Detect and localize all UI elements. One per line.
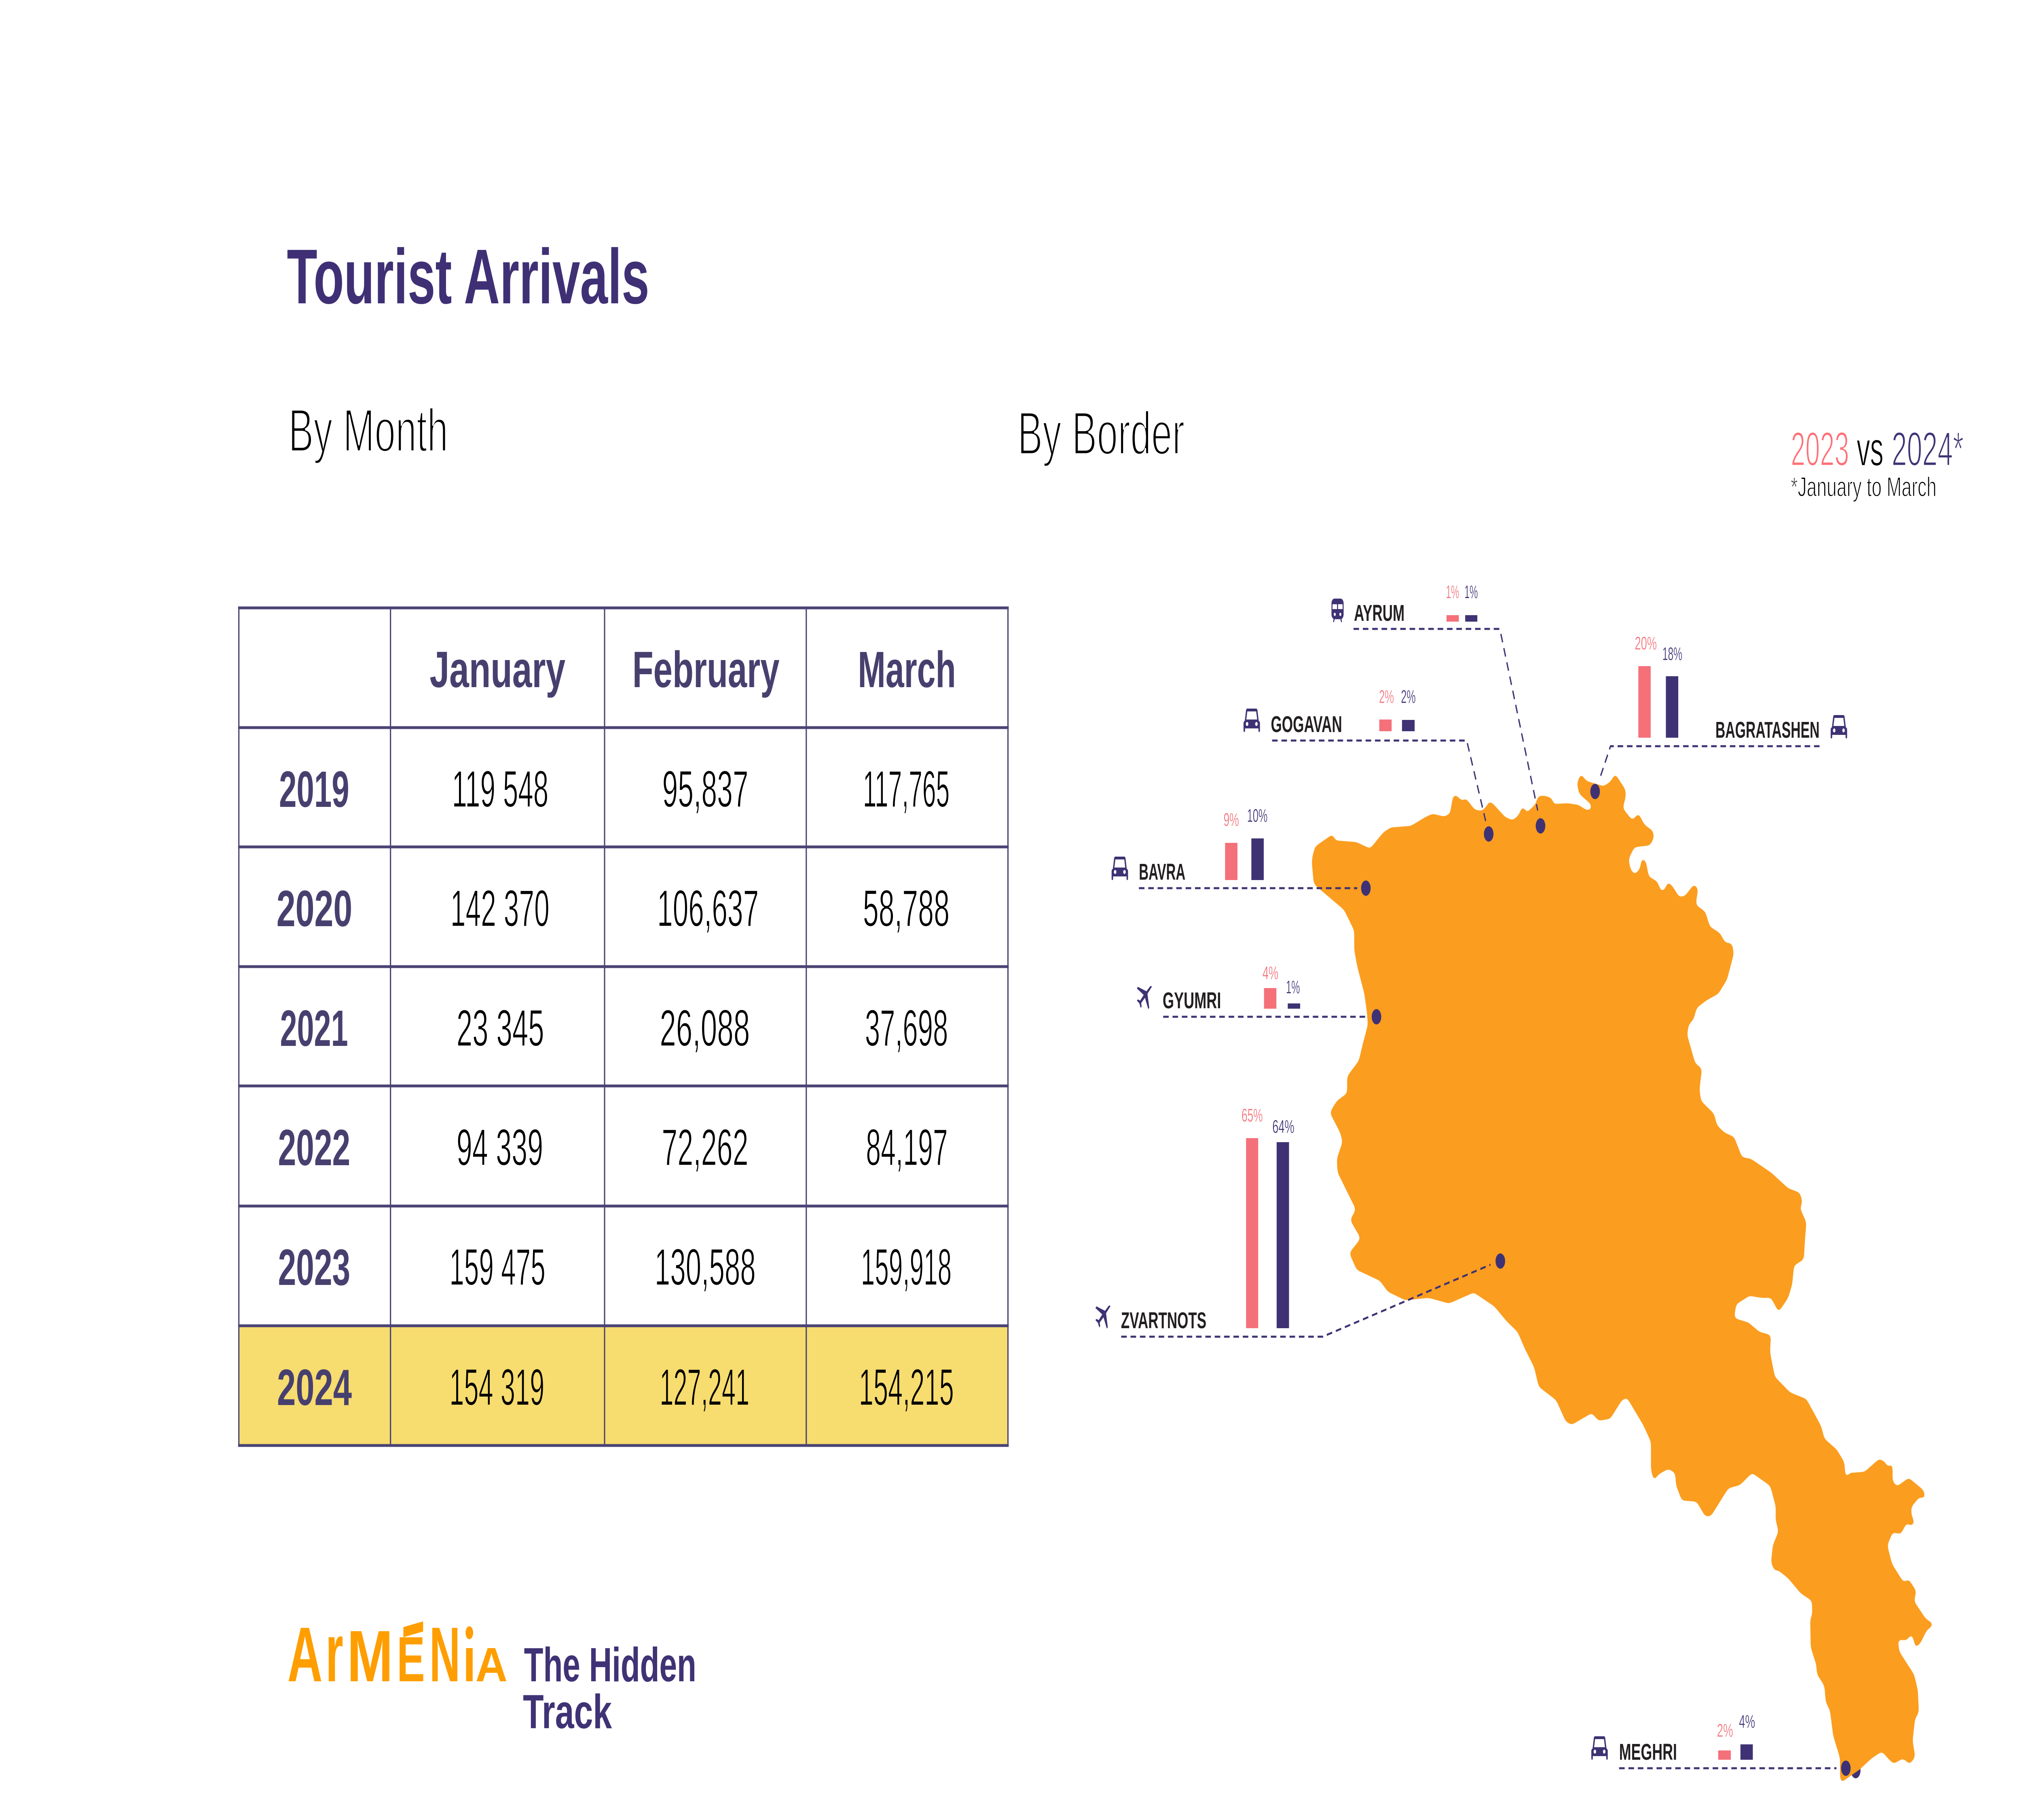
row 2023: 2023 bbox=[278, 1239, 350, 1296]
label: Gyumri: GYUMRI bbox=[1163, 988, 1221, 1014]
border: Ayrum bbox=[1331, 582, 1545, 834]
label: Meghri: MEGHRI bbox=[1619, 1740, 1677, 1765]
heading: by border: By Border bbox=[1017, 399, 1184, 467]
row 2023: 159,918 bbox=[861, 1238, 952, 1296]
border: Bavra bbox=[1112, 805, 1371, 896]
icon: plane bbox=[1096, 1306, 1110, 1329]
map of Armenia bbox=[1312, 774, 1935, 1783]
bars: Bagratashen bbox=[1635, 633, 1682, 738]
logo wordmark: A bbox=[476, 1638, 508, 1692]
row 2023: 159 475 bbox=[449, 1238, 546, 1296]
row 2024 highlighted: 2024 bbox=[277, 1359, 352, 1416]
border: Zvartnots bbox=[1096, 1105, 1505, 1337]
row 2020: 2020 bbox=[277, 880, 352, 938]
bars: Bavra bbox=[1224, 805, 1267, 880]
row 2023: 130,588 bbox=[655, 1238, 756, 1296]
bars: Meghri bbox=[1717, 1711, 1755, 1760]
row 2020: 142 370 bbox=[451, 879, 550, 938]
legend: 2023 vs 2024: 2023 bbox=[1791, 422, 1849, 476]
bars: Gyumri: 1% bbox=[1286, 977, 1300, 997]
bars: Ayrum: 1% bbox=[1464, 582, 1478, 602]
row 2020 bbox=[277, 879, 950, 938]
dot: Ayrum bbox=[1536, 818, 1545, 834]
logo wordmark: A bbox=[288, 1611, 323, 1698]
title: Tourist Arrivals bbox=[287, 233, 649, 320]
leader: Ayrum bbox=[1354, 629, 1538, 811]
icon: car bbox=[1244, 709, 1260, 732]
row 2019: 2019 bbox=[279, 761, 349, 818]
dot: Gyumri bbox=[1372, 1009, 1381, 1024]
row 2020: 106,637 bbox=[657, 879, 759, 938]
legend: 2023 vs 2024: *January to March bbox=[1791, 472, 1937, 503]
bars: Zvartnots: 64% bbox=[1272, 1116, 1294, 1137]
dot: Zvartnots bbox=[1495, 1253, 1505, 1269]
row 2019: 119 548 bbox=[452, 760, 548, 818]
bars: Bagratashen: 20% bbox=[1635, 633, 1657, 654]
dot: Gogavan bbox=[1484, 826, 1493, 842]
label: Bavra: BAVRA bbox=[1139, 859, 1185, 885]
border: Gogavan bbox=[1244, 686, 1493, 842]
row 2021: 37,698 bbox=[865, 999, 948, 1057]
bars: Bavra: 10% bbox=[1247, 805, 1267, 826]
bars: Gyumri bbox=[1263, 963, 1300, 1009]
bars: Zvartnots: 65% bbox=[1242, 1105, 1263, 1126]
row 2022: 72,262 bbox=[662, 1118, 749, 1177]
icon: car bbox=[1831, 715, 1847, 739]
bars: Bagratashen: 18% bbox=[1662, 643, 1682, 664]
border: Meghri bbox=[1591, 1711, 1851, 1776]
leader: Bavra bbox=[1139, 887, 1357, 889]
row 2019 bbox=[279, 760, 950, 818]
row 2024 highlighted: 154,215 bbox=[859, 1358, 954, 1416]
legend: 2023 vs 2024 bbox=[1791, 422, 1964, 503]
legend: 2023 vs 2024: 2024* bbox=[1892, 422, 1964, 476]
leader: Bagratashen bbox=[1601, 746, 1819, 776]
bars: Meghri: 4% bbox=[1739, 1711, 1755, 1732]
border: Bagratashen bbox=[1590, 633, 1847, 799]
leader: Gogavan bbox=[1272, 741, 1486, 821]
label: Gogavan: GOGAVAN bbox=[1271, 712, 1342, 737]
border: Gyumri bbox=[1137, 963, 1381, 1024]
row 2022: 94 339 bbox=[457, 1118, 543, 1177]
table: arrivals by month bbox=[238, 607, 1009, 1447]
leader: Meghri bbox=[1619, 1767, 1836, 1769]
icon: plane bbox=[1137, 986, 1152, 1009]
bars: Ayrum bbox=[1446, 582, 1478, 622]
bars: Zvartnots bbox=[1242, 1105, 1294, 1328]
table header row: March bbox=[858, 641, 956, 698]
row 2024 highlighted bbox=[277, 1358, 954, 1416]
logo tagline bbox=[523, 1638, 696, 1739]
row 2019: 95,837 bbox=[662, 760, 749, 818]
heading: by month: By Month bbox=[288, 396, 448, 464]
icon: car bbox=[1591, 1736, 1608, 1760]
bars: Ayrum: 1% bbox=[1446, 582, 1459, 602]
logo wordmark: M bbox=[347, 1615, 393, 1697]
row 2024 highlighted: 127,241 bbox=[660, 1358, 749, 1416]
table header row bbox=[430, 641, 956, 698]
logo wordmark: N bbox=[429, 1611, 460, 1698]
hidden dot behind map at Meghri bbox=[1851, 1763, 1861, 1778]
logo: Armenia The Hidden Track bbox=[288, 1606, 696, 1739]
table header row: January bbox=[430, 641, 565, 698]
legend: 2023 vs 2024: vs bbox=[1857, 422, 1884, 476]
row 2022: 2022 bbox=[278, 1120, 350, 1177]
row 2023 bbox=[278, 1238, 952, 1296]
logo wordmark: r bbox=[326, 1606, 343, 1699]
row 2021 bbox=[280, 999, 948, 1057]
icon: car bbox=[1112, 857, 1128, 880]
icon: train bbox=[1331, 599, 1343, 622]
row 2021: 26,088 bbox=[660, 999, 750, 1057]
bars: Gogavan bbox=[1379, 686, 1416, 731]
label: Ayrum: AYRUM bbox=[1354, 601, 1404, 626]
row 2021: 23 345 bbox=[457, 999, 544, 1057]
row 2021: 2021 bbox=[280, 1000, 348, 1057]
dot: Bavra bbox=[1361, 880, 1371, 896]
row 2019: 117,765 bbox=[863, 760, 950, 818]
bars: Meghri: 2% bbox=[1717, 1720, 1733, 1741]
row 2022 bbox=[278, 1118, 948, 1177]
label: Bagratashen: BAGRATASHEN bbox=[1715, 717, 1819, 743]
bars: Gogavan: 2% bbox=[1379, 686, 1394, 707]
leader: Gyumri bbox=[1163, 1016, 1368, 1018]
bars: Gogavan: 2% bbox=[1401, 686, 1416, 707]
bars: Gyumri: 4% bbox=[1263, 963, 1278, 983]
row 2024 highlighted: 154 319 bbox=[449, 1358, 544, 1416]
label: Zvartnots: ZVARTNOTS bbox=[1121, 1308, 1206, 1333]
dot: Meghri bbox=[1841, 1761, 1851, 1776]
bars: Bavra: 9% bbox=[1224, 809, 1239, 830]
leader: Zvartnots bbox=[1121, 1265, 1491, 1337]
logo tagline: Track bbox=[523, 1685, 612, 1739]
logo wordmark: E bbox=[397, 1623, 425, 1695]
row 2022: 84,197 bbox=[866, 1118, 948, 1177]
table header row: February bbox=[632, 641, 779, 698]
dot: Bagratashen bbox=[1590, 784, 1600, 799]
logo tagline: The Hidden bbox=[524, 1638, 696, 1692]
row 2020: 58,788 bbox=[863, 879, 950, 938]
logo wordmark bbox=[288, 1606, 508, 1699]
